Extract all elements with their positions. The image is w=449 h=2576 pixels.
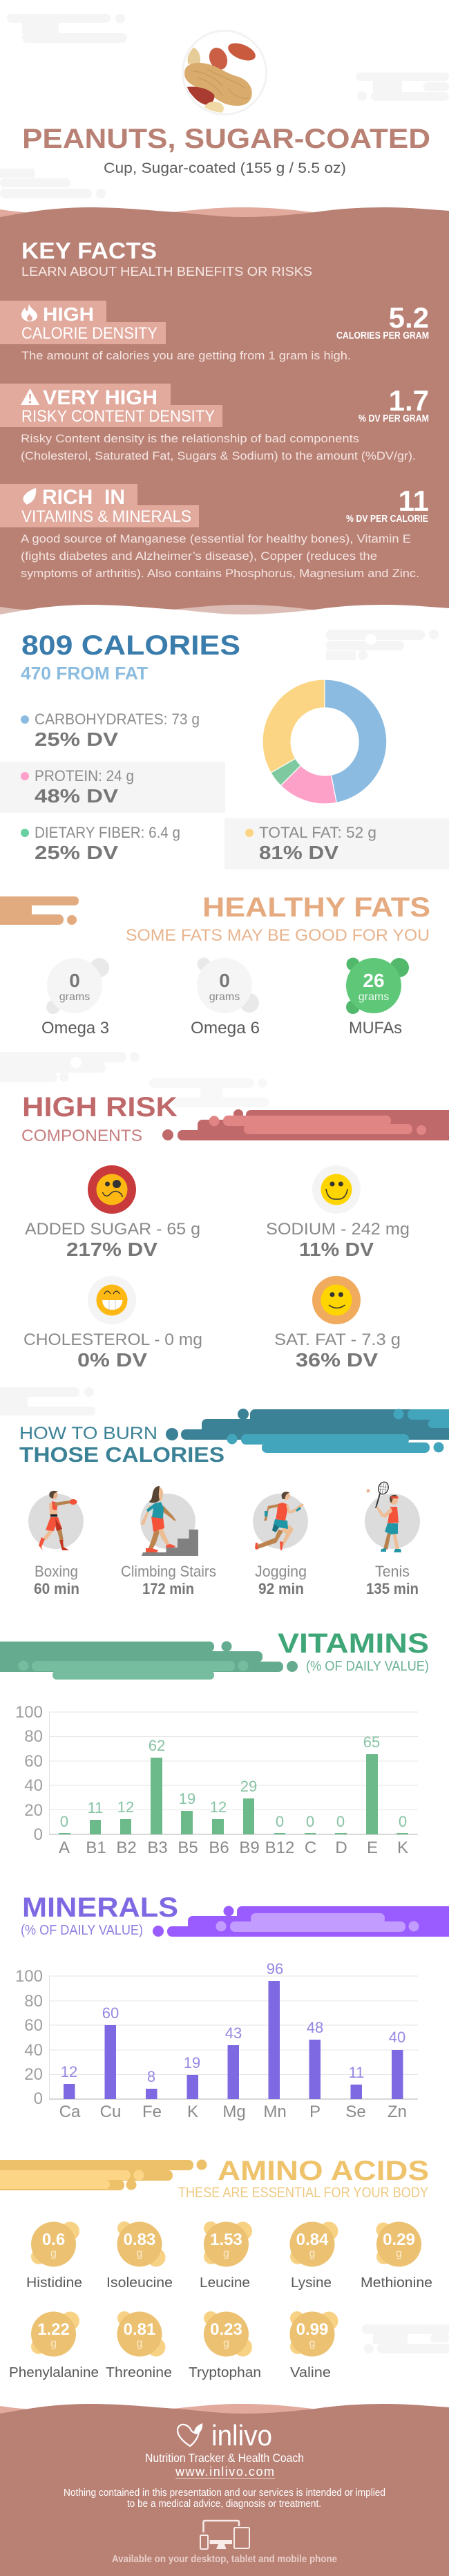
chart: macronutrient donut [262,679,387,804]
legend: carbohydrates: 25% DV [35,728,118,750]
icon: peanut photo [182,30,267,115]
chart: vitamins bar chart: K [397,1839,408,1857]
heading: vitamins: VITAMINS [278,1628,429,1659]
stat: 11 percent DV per calorie: 11 [399,485,429,517]
amino: valine: g [309,2338,315,2349]
chart: vitamins bar chart: 19 [179,1790,195,1807]
chart: minerals bar chart: Ca [59,2103,81,2121]
amino: tryptophan: g [223,2338,229,2349]
subheading: some fats: SOME FATS MAY BE GOOD FOR YOU [126,926,430,945]
amino: isoleucine: g [137,2248,142,2259]
label: high: HIGH [43,303,94,325]
legend: dietary fiber [21,824,180,863]
chart: minerals bar chart: 96 [267,1960,283,1977]
decorative cloud: amino right [362,2324,449,2353]
item: sodium [266,1165,410,1260]
amino: threonine: Threonine [106,2365,172,2380]
chart: minerals bar chart: 0 [34,2089,43,2108]
amino: methionine: Methionine [361,2275,432,2291]
legend: protein [0,762,225,813]
amino: tryptophan [189,2311,261,2380]
heading: key facts: KEY FACTS [21,238,157,263]
callout: vitamins and minerals [0,484,429,580]
labels: activities: Boxing [35,1563,78,1580]
decorative cloud: top right [356,73,449,101]
text: disclaimer: Nothing contained in this presentation and our services is intended or implied [64,2488,385,2499]
amino: threonine: g [137,2338,142,2349]
banner: high risk [162,1109,449,1140]
amino: leucine: 1.53 [210,2230,242,2249]
amino: phenylalanine: Phenylalanine [9,2365,99,2380]
amino: methionine: g [396,2248,402,2259]
amino: threonine: 0.81 [124,2320,155,2339]
panel: amino acids [0,2156,432,2380]
activity: tennis [365,1480,420,1552]
legend: protein: 48% DV [35,785,118,807]
amino: leucine: Leucine [200,2275,250,2291]
stat: mufas: 26 [363,970,385,991]
chart: minerals bar chart: 20 [24,2065,43,2084]
amino: histidine: Histidine [26,2275,82,2291]
chart: minerals bar chart: Fe [142,2103,162,2121]
text: vitamins description: A good source of Manganese (essential for healthy bones), Vitamin E [21,532,411,545]
label: calorie density: CALORIE DENSITY [21,324,157,343]
heading: amino acids: AMINO ACIDS [218,2156,429,2186]
subtitle: serving size: Cup, Sugar-coated (155 g / 5.5 oz) [104,160,346,176]
chart: minerals bar chart: 8 [147,2068,155,2085]
amino: methionine [361,2221,432,2291]
chart: vitamins bar chart: B2 [116,1839,137,1857]
text: risky description [21,432,416,462]
chart: vitamins bar chart: A [59,1839,70,1857]
chart: minerals bar chart [15,1960,418,2121]
icon: warning triangle [21,388,39,405]
chart: minerals bar chart: Mg [222,2103,246,2121]
panel: how to burn those calories [19,1409,449,1597]
chart: minerals bar chart: 60 [102,2004,119,2022]
icon: flame [21,304,37,321]
chart: vitamins bar chart: 12 [210,1798,227,1816]
stat: mufas: grams [359,991,389,1003]
labels: activities: 172 min [142,1580,194,1597]
stat: omega 6 [191,958,260,1037]
heading: those calories: THOSE CALORIES [19,1442,224,1467]
heading: minerals: MINERALS [22,1892,178,1923]
labels: activities [34,1563,419,1597]
amino: isoleucine: 0.83 [124,2230,155,2249]
amino: isoleucine: Isoleucine [106,2275,173,2291]
amino: lysine [290,2221,338,2291]
labels: activities: Tenis [375,1563,410,1580]
chart: vitamins bar chart: 20 [24,1801,43,1820]
chart: minerals bar chart: Cu [100,2103,121,2121]
chart: minerals bar chart: 100 [15,1967,43,1986]
amino: phenylalanine [9,2311,99,2380]
banner: amino acids [0,2159,207,2190]
icon: devices [200,2521,249,2549]
stat: omega 3: 0 [69,970,80,991]
chart: vitamins bar chart: 0 [276,1813,284,1830]
banner: burn [166,1409,449,1453]
chart: minerals bar chart: 80 [24,1992,43,2011]
chart: minerals bar chart: 11 [349,2064,364,2081]
chart: vitamins bar chart: B5 [178,1839,198,1857]
chart: vitamins bar chart: 60 [24,1752,43,1771]
chart: vitamins bar chart: B1 [86,1839,106,1857]
activity: climbing stairs [140,1486,198,1556]
text: vitamins description [21,532,419,580]
stat: omega 6: 0 [219,970,230,991]
chart: vitamins bar chart: 0 [306,1813,314,1830]
panel: healthy fats [0,892,430,1037]
amino: valine [290,2311,338,2380]
item: sodium: 11% DV [299,1239,374,1260]
chart: minerals bar chart: 12 [61,2063,77,2080]
subheading: percent of daily value: (% OF DAILY VALUE) [21,1923,143,1938]
chart: minerals bar chart: 40 [389,2029,405,2046]
stat: omega 6: grams [209,991,240,1003]
chart: vitamins bar chart [15,1703,418,1857]
amino: tryptophan: 0.23 [210,2320,242,2339]
text: vitamins description: (fights diabetes and Alzheimer’s disease), Copper (reduces the [21,549,377,563]
banner: vitamins [0,1641,298,1680]
decorative cloud: before burn section [0,1387,95,1416]
amino: isoleucine [106,2221,173,2291]
labels: activities: 92 min [258,1580,304,1597]
amino: valine: Valine [290,2365,331,2380]
legend: total fat: 81% DV [259,842,338,863]
logo: inlivo [178,2419,272,2452]
amino: histidine: g [50,2248,57,2259]
stat: omega 3 [41,958,109,1037]
legend: dietary fiber: 25% DV [35,842,118,863]
label: risky content density: RISKY CONTENT DENSITY [21,407,215,426]
chart: vitamins bar chart: E [367,1839,378,1857]
label: very high: VERY HIGH [43,386,157,409]
stat: 5.2 calories per gram: 5.2 [389,301,429,334]
chart: vitamins bar chart: B3 [147,1839,168,1857]
chart: vitamins bar chart: 0 [34,1825,43,1844]
callout: risky content density [0,384,429,462]
heading: how to burn: HOW TO BURN [19,1424,157,1443]
decorative cloud: before high risk [0,1052,140,1082]
chart: vitamins bar chart: 29 [240,1778,257,1795]
chart: minerals bar chart: 48 [307,2019,323,2036]
stat: mufas [346,958,409,1037]
banner: minerals [153,1906,449,1937]
amino: histidine [26,2221,82,2291]
panel: footer [0,2404,449,2576]
item: cholesterol: 0% DV [77,1349,147,1371]
text: availability: Available on your desktop, tablet and mobile phone [112,2553,337,2565]
labels: activities: Jogging [255,1563,307,1580]
chart: minerals bar chart: K [187,2103,198,2121]
icon: leaf [23,488,36,505]
amino: leucine: g [223,2248,229,2259]
panel: high risk [21,1092,449,1371]
item: sodium: SODIUM - 242 mg [266,1220,410,1239]
subheading: components: COMPONENTS [21,1127,142,1145]
subheading: 470 from fat: 470 FROM FAT [21,663,148,684]
chart: minerals bar chart: Zn [388,2103,407,2121]
stat: omega 3: Omega 3 [41,1019,109,1037]
stat: mufas: MUFAs [349,1019,402,1037]
amino: lysine: g [309,2248,315,2259]
chart: vitamins bar chart: 80 [24,1727,43,1746]
labels: activities: 135 min [366,1580,419,1597]
callout: calorie density [0,301,429,362]
amino: phenylalanine: g [50,2338,57,2349]
banner: healthy fats [0,896,79,925]
heading: 809 calories: 809 CALORIES [21,630,240,661]
legend: total fat: TOTAL FAT: 52 g [259,824,376,841]
chart: minerals bar chart: 40 [24,2041,43,2060]
chart: vitamins bar chart: 62 [149,1737,165,1754]
chart: vitamins bar chart: 0 [399,1813,407,1830]
item: added sugar: 217% DV [66,1239,157,1260]
chart: vitamins bar chart: 65 [363,1733,380,1751]
heading: healthy fats: HEALTHY FATS [202,892,430,923]
label: rich in: RICH IN [42,486,125,509]
chart: vitamins bar chart: D [335,1839,347,1857]
panel: minerals [15,1892,449,2121]
stat: 11 percent DV per calorie: % DV PER CALORIE [346,514,428,525]
decorative cloud: calories [326,630,439,660]
amino: methionine: 0.29 [383,2230,415,2249]
item: added sugar: ADDED SUGAR - 65 g [25,1220,200,1239]
chart: vitamins bar chart: B9 [239,1839,260,1857]
chart: minerals bar chart: 19 [184,2054,200,2071]
title: PEANUTS, SUGAR-COATED [22,124,430,154]
chart: minerals bar chart: 43 [225,2024,242,2042]
stat: 11 percent DV per calorie [346,485,429,525]
chart: minerals bar chart: Mn [263,2103,287,2121]
chart: vitamins bar chart: 0 [336,1813,345,1830]
stat: 1.7 percent DV per gram: 1.7 [389,384,429,417]
chart: vitamins bar chart: C [305,1839,316,1857]
amino: phenylalanine: 1.22 [37,2320,70,2339]
legend: carbohydrates [21,711,200,750]
chart: minerals bar chart: 60 [24,2016,43,2035]
amino: valine: 0.99 [296,2320,328,2339]
text: calorie description: The amount of calories you are getting from 1 gram is high. [21,349,351,362]
text: disclaimer [64,2488,385,2510]
text: vitamins description: symptoms of arthritis). Also contains Phosphorus, Magnesium and Zinc. [21,567,419,580]
chart: minerals bar chart: P [309,2103,321,2121]
legend: carbohydrates: CARBOHYDRATES: 73 g [35,711,200,728]
item: cholesterol [23,1276,202,1371]
text: risky description: Risky Content density is the relationship of bad components [21,432,359,445]
amino: leucine [200,2221,252,2291]
activity: jogging [253,1492,308,1550]
chart: vitamins bar chart: 40 [24,1776,43,1795]
legend: dietary fiber: DIETARY FIBER: 6.4 g [35,824,180,841]
stat: 1.7 percent DV per gram: % DV PER GRAM [359,413,429,424]
text: website: www.inlivo.com [175,2465,274,2479]
amino: histidine: 0.6 [42,2230,65,2249]
legend: protein: PROTEIN: 24 g [35,767,134,784]
panel: vitamins [0,1628,429,1857]
stat: omega 6: Omega 6 [191,1019,260,1037]
item: added sugar [25,1165,200,1260]
label: vitamins and minerals: VITAMINS & MINERALS [21,507,191,526]
activity: boxing [28,1491,84,1550]
chart: vitamins bar chart: B6 [209,1839,229,1857]
stat: omega 3: grams [59,991,90,1003]
chart: vitamins bar chart: B12 [265,1839,294,1857]
chart: vitamins bar chart: 0 [60,1813,68,1830]
item: saturated fat: SAT. FAT - 7.3 g [274,1331,401,1349]
text: disclaimer: to be a medical advice, diagnosis or treatment. [127,2499,321,2510]
subheading: learn about: LEARN ABOUT HEALTH BENEFITS OR RISKS [21,265,312,279]
item: saturated fat: 36% DV [296,1349,378,1371]
subheading: percent of daily value: (% OF DAILY VALUE) [306,1659,429,1674]
chart: vitamins bar chart: 12 [117,1798,134,1816]
decorative cloud: middle left [0,169,106,198]
panel: key facts [0,207,449,632]
heading: high risk: HIGH RISK [22,1092,178,1122]
chart: vitamins bar chart: 100 [15,1703,43,1722]
text: tagline: Nutrition Tracker & Health Coach [145,2451,304,2465]
logo: inlivo: inlivo [211,2419,272,2452]
labels: activities: 60 min [34,1580,79,1597]
amino: lysine: Lysine [291,2275,332,2291]
decorative cloud: above high risk banner [149,1078,269,1107]
amino: threonine [106,2311,172,2380]
stat: 1.7 percent DV per gram [359,384,429,424]
panel: calories [0,630,449,869]
item: saturated fat [274,1276,401,1371]
text: risky description: (Cholesterol, Saturated Fat, Sugars & Sodium) to the amount (%DV/gr). [21,449,416,462]
legend: total fat [224,818,449,869]
item: cholesterol: CHOLESTEROL - 0 mg [23,1331,202,1349]
stat: 5.2 calories per gram [336,301,429,341]
chart: vitamins bar chart: 11 [88,1799,103,1816]
labels: activities: Climbing Stairs [121,1563,216,1580]
decorative cloud: top left [7,14,127,43]
chart: minerals bar chart: Se [345,2103,366,2121]
amino: lysine: 0.84 [296,2230,329,2249]
stat: 5.2 calories per gram: CALORIES PER GRAM [336,330,429,341]
amino: tryptophan: Tryptophan [189,2365,261,2380]
